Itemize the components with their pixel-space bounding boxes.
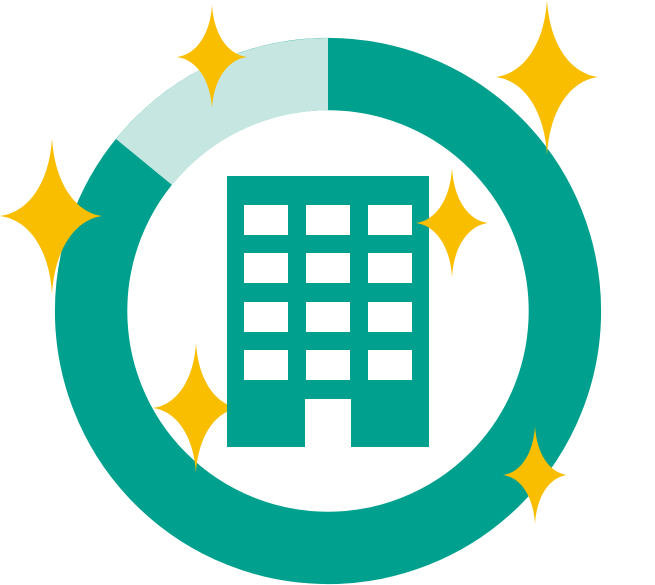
sparkle: top right <box>496 0 598 155</box>
sparkle: on building right <box>416 168 488 277</box>
building body <box>227 176 429 447</box>
icon: office building <box>227 176 429 447</box>
building windows <box>244 205 412 380</box>
sparkle: lower left, behind building <box>153 343 239 473</box>
sparkle: left <box>0 138 102 294</box>
donut chart <box>91 38 565 548</box>
donut light segment <box>116 38 328 185</box>
donut main segment <box>91 74 565 548</box>
sparkle: top center <box>177 5 247 108</box>
sparkle: lower right <box>503 426 567 524</box>
